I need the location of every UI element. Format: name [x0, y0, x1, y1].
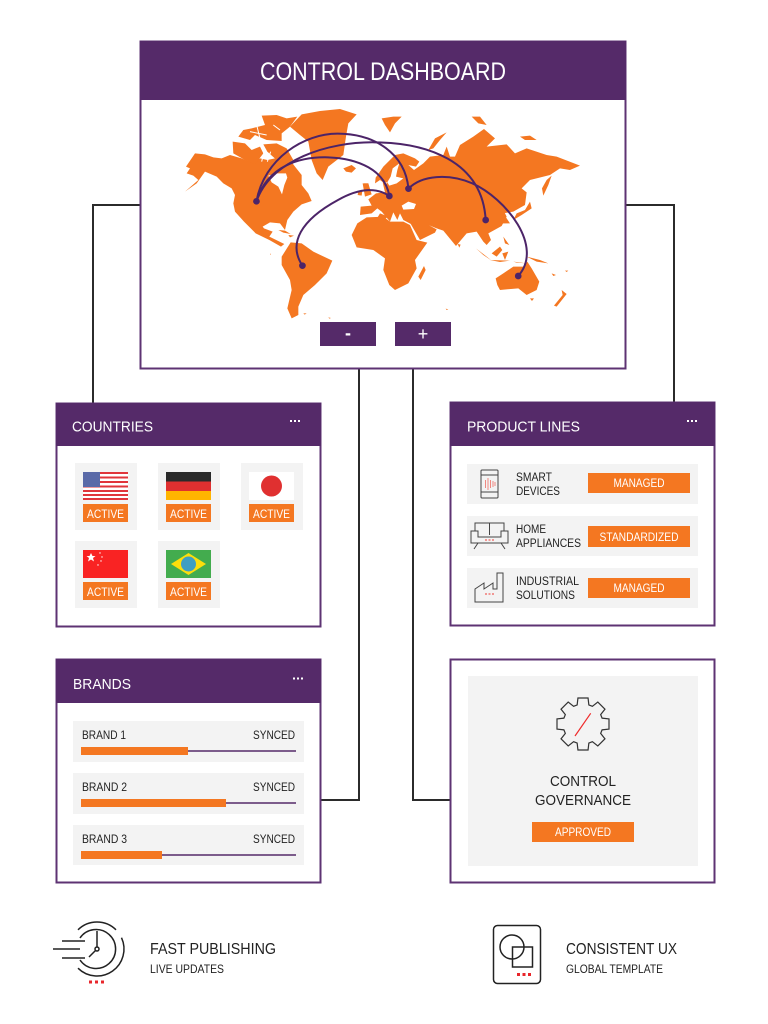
text: control governance: GOVERNANCE — [535, 792, 631, 809]
panel: control dashboard — [140, 41, 626, 368]
tile: germany — [158, 463, 220, 530]
tile: china — [75, 541, 137, 608]
badge: approved — [532, 822, 634, 842]
tile: japan — [241, 463, 303, 530]
icon: gear — [557, 698, 609, 750]
text: control governance: CONTROL — [550, 773, 616, 790]
heading: control dashboard — [140, 41, 626, 100]
row: smart devices: DEVICES — [516, 486, 560, 498]
row: brand 3: BRAND 3 — [82, 834, 127, 846]
heading: countries: COUNTRIES — [72, 418, 153, 436]
row: brand 2 — [73, 773, 304, 814]
panel: control governance — [450, 660, 714, 882]
badge: approved: APPROVED — [555, 825, 611, 839]
row: smart devices: SMART — [516, 472, 552, 484]
row: brand 1 — [73, 721, 304, 762]
zoom in button: + — [418, 324, 428, 344]
row: brand 1: SYNCED — [253, 730, 295, 742]
row: home appliances: STANDARDIZED — [600, 530, 679, 544]
feature: fast publishing — [53, 922, 276, 982]
zoom out button — [320, 322, 376, 346]
feature: consistent ux: CONSISTENT UX — [566, 941, 678, 958]
icon: clock — [53, 922, 124, 982]
panel: countries — [56, 403, 321, 626]
tile: germany: ACTIVE — [170, 507, 207, 521]
row: home appliances: APPLIANCES — [516, 538, 581, 550]
route arcs — [253, 134, 527, 279]
zoom in button — [395, 322, 451, 346]
tile: brazil — [158, 541, 220, 608]
icon: factory — [475, 573, 503, 602]
row: brand 3: SYNCED — [253, 834, 295, 846]
row: smart devices — [467, 464, 698, 504]
feature: consistent ux: GLOBAL TEMPLATE — [566, 964, 663, 976]
row: brand 2: SYNCED — [253, 782, 295, 794]
text: control governance — [535, 773, 631, 809]
row: industrial solutions: MANAGED — [614, 581, 665, 595]
heading: countries — [56, 403, 321, 446]
tile: brazil: ACTIVE — [170, 585, 207, 599]
tile: usa — [75, 463, 137, 530]
feature: consistent ux — [494, 926, 678, 984]
heading: brands — [56, 659, 321, 703]
world map — [185, 109, 580, 319]
panel: product lines — [450, 402, 715, 626]
row: brand 3 — [73, 825, 304, 865]
tile: usa: ACTIVE — [87, 507, 124, 521]
icon: couch — [471, 523, 508, 549]
zoom out button: - — [345, 323, 351, 343]
row: industrial solutions: INDUSTRIAL — [516, 576, 580, 588]
row: home appliances — [467, 516, 698, 556]
icon: template device — [494, 926, 540, 984]
row: brand 2: BRAND 2 — [82, 782, 127, 794]
panel: brands — [56, 659, 321, 882]
tile: japan: ACTIVE — [253, 507, 290, 521]
icon: smartphone — [481, 470, 498, 498]
heading: brands: BRANDS — [73, 676, 131, 693]
feature: fast publishing: FAST PUBLISHING — [150, 941, 276, 958]
row: brand 1: BRAND 1 — [82, 730, 126, 742]
row: home appliances: HOME — [516, 524, 546, 536]
heading: product lines: PRODUCT LINES — [467, 418, 580, 436]
row: industrial solutions: SOLUTIONS — [516, 590, 575, 602]
row: smart devices: MANAGED — [614, 476, 665, 490]
row: industrial solutions — [467, 568, 698, 608]
feature: fast publishing: LIVE UPDATES — [150, 964, 224, 976]
tile: china: ACTIVE — [87, 585, 124, 599]
heading: control dashboard: CONTROL DASHBOARD — [260, 58, 506, 86]
heading: product lines — [450, 402, 715, 446]
